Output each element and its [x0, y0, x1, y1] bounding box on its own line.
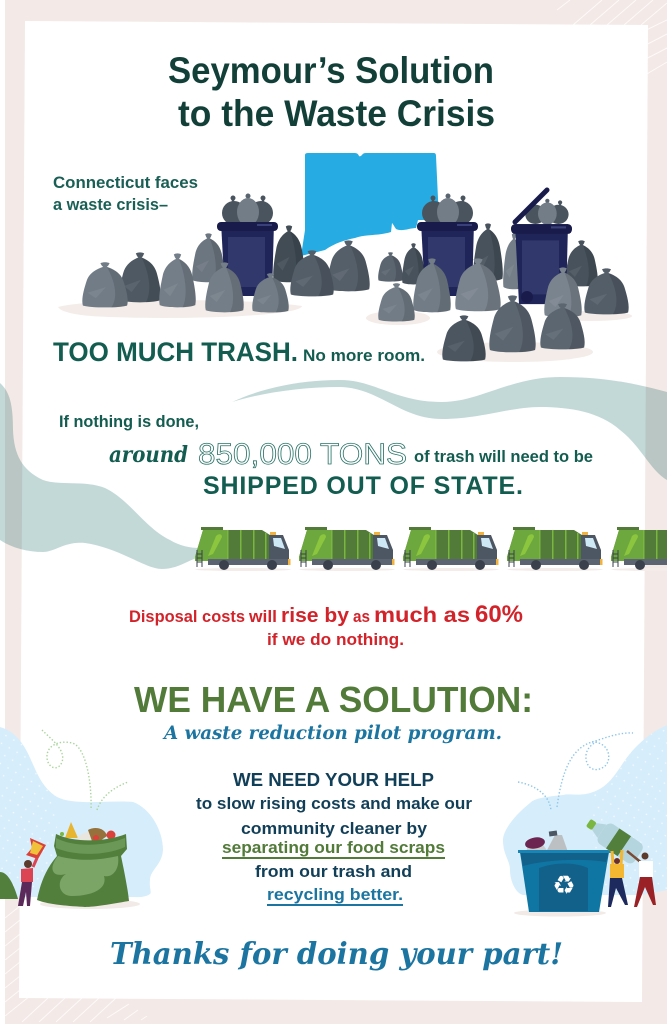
- text: if nothing is done: [59, 412, 593, 500]
- title: to the Waste Crisis: [178, 93, 495, 134]
- text: disposal costs: if we do nothing.: [267, 630, 404, 649]
- text: disposal costs: as: [353, 607, 370, 626]
- text: we need your help: to slow rising costs and make our: [196, 794, 472, 813]
- text: disposal costs: much as: [374, 604, 470, 627]
- text: Connecticut faces a waste crisis: a waste crisis–: [53, 195, 168, 214]
- text: disposal costs: 60%: [475, 601, 523, 628]
- text: we need your help: separating our food scraps: [222, 838, 445, 857]
- text: if nothing is done: If nothing is done,: [59, 412, 199, 431]
- text: if nothing is done: of trash will need to be: [414, 447, 593, 466]
- thanks message: Thanks for doing your part!: [110, 937, 563, 972]
- text: we need your help: from our trash and: [255, 862, 412, 881]
- heading: we have a solution: A waste reduction pilot program.: [162, 722, 502, 744]
- recycling symbol: ♻: [552, 871, 576, 901]
- dotted path: [518, 733, 633, 811]
- heading: we have a solution: WE HAVE A SOLUTION:: [134, 679, 533, 720]
- text: if nothing is done: around: [109, 442, 188, 468]
- text: we need your help: recycling better.: [267, 885, 403, 904]
- text: Connecticut faces a waste crisis: [53, 173, 198, 214]
- title: Seymour’s Solution: [168, 50, 494, 91]
- text: too much trash: No more room.: [303, 346, 425, 365]
- text: if nothing is done: 850,000 TONS: [198, 438, 407, 471]
- text: too much trash: TOO MUCH TRASH.: [53, 337, 298, 367]
- food scraps: [60, 822, 116, 842]
- text: we need your help: community cleaner by: [241, 819, 428, 838]
- illustration: recycling: [503, 725, 667, 916]
- wave: upper right: [232, 377, 667, 480]
- text: disposal costs: rise by: [281, 605, 350, 627]
- garbage trucks: [195, 527, 667, 571]
- person in white: [627, 851, 656, 907]
- text: we need your help: WE NEED YOUR HELP: [233, 769, 434, 790]
- text: if nothing is done: SHIPPED OUT OF STATE.: [203, 472, 523, 500]
- illustration: food scraps: [0, 727, 163, 909]
- person in yellow: [608, 850, 628, 907]
- small sack: [0, 872, 18, 899]
- wave: left to trucks: [0, 383, 200, 569]
- text: we need your help: [196, 769, 472, 906]
- map of Connecticut: [301, 153, 439, 256]
- text: too much trash: [53, 337, 425, 367]
- left bag pile: [82, 194, 370, 313]
- dotted path: [42, 730, 128, 810]
- trash bags and bins: [58, 190, 632, 362]
- green sack: [37, 834, 129, 907]
- title: [168, 50, 495, 134]
- person holding apple core: [18, 838, 46, 906]
- text: disposal costs: Disposal costs: [129, 607, 245, 626]
- big bottle: [582, 812, 645, 866]
- blue recycling bin: [518, 850, 611, 912]
- right bag pile: [378, 190, 629, 361]
- text: disposal costs: will: [248, 607, 277, 626]
- text: disposal costs: [129, 601, 523, 649]
- text: Connecticut faces a waste crisis: Connecticut faces: [53, 173, 198, 192]
- jar and jug: [524, 830, 568, 852]
- heading: we have a solution: [134, 679, 533, 744]
